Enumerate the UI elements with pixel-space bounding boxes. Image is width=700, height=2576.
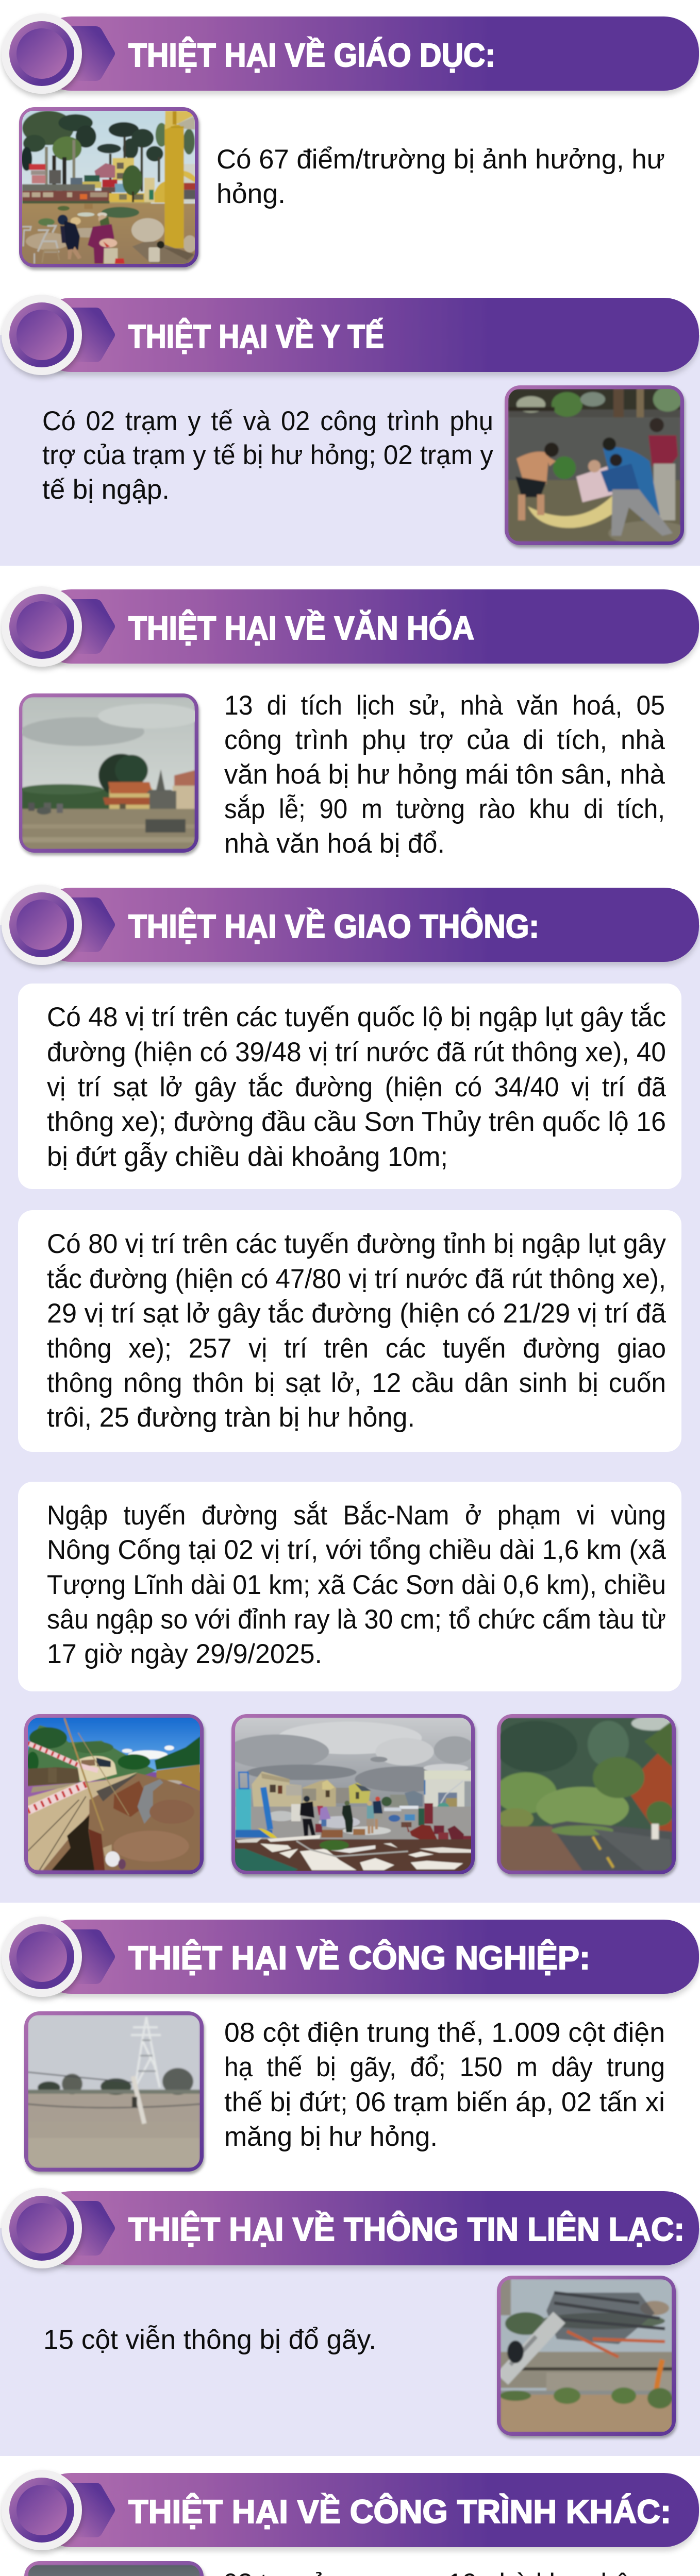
text: education damage: hỏng. — [216, 179, 286, 209]
photo: landslide on forest road — [495, 1714, 676, 1874]
text: health damage — [42, 406, 493, 505]
heading: culture: THIỆT HẠI VỀ VĂN HÓA — [128, 609, 474, 647]
photo: flooded temple — [19, 693, 201, 853]
heading: culture — [2, 586, 699, 667]
heading: health: THIỆT HẠI VỀ Y TẾ — [128, 317, 384, 355]
card: provincial roads: Có 80 vị trí trên các tuyến đường tỉnh bị ngập lụt gây — [47, 1229, 666, 1259]
text: communications damage: 15 cột viễn thông bị đổ gãy. — [43, 2325, 376, 2355]
text: education damage: Có 67 điểm/trường bị ảnh hưởng, hư — [216, 144, 665, 175]
panel: industry — [2, 1917, 699, 2172]
heading: transport: THIỆT HẠI VỀ GIAO THÔNG: — [128, 907, 539, 945]
card: railway: 17 giờ ngày 29/9/2025. — [47, 1639, 322, 1669]
text: culture damage: công trình phụ trợ của di tích, nhà — [224, 725, 665, 755]
panel: culture — [2, 586, 699, 859]
card: national roads: Có 48 vị trí trên các tuyến quốc lộ bị ngập lụt gây tắc — [47, 1002, 666, 1032]
card: national roads: bị đứt gẫy chiều dài khoảng 10m; — [47, 1142, 448, 1172]
text: industry damage: thế bị đứt; 06 trạm biến áp, 02 tấn xi — [224, 2087, 665, 2117]
card: railway: Tượng Lĩnh dài 01 km; xã Các Sơn dài 0,6 km), chiều — [47, 1570, 666, 1600]
card: national roads: vị trí sạt lở gây tắc đường (hiện có 34/40 vị trí đã — [47, 1072, 666, 1103]
text: health damage: Có 02 trạm y tế và 02 công trình phụ — [42, 406, 493, 436]
card: national roads: đường (hiện có 39/48 vị trí nước đã rút thông xe), 40 — [47, 1037, 666, 1067]
text: education damage — [216, 144, 665, 209]
card: provincial roads: trôi, 25 đường tràn bị hư hỏng. — [47, 1402, 415, 1433]
panel: transport — [2, 885, 699, 1874]
heading: education — [2, 13, 699, 94]
card: provincial roads — [18, 1210, 681, 1452]
heading: other works — [2, 2470, 699, 2550]
card: national roads: thông xe); đường đầu cầu Sơn Thủy trên quốc lộ 16 — [47, 1107, 666, 1137]
photo: collapsed walls and debris — [226, 1714, 475, 1874]
photo: flooded power pole — [24, 2011, 204, 2172]
card: railway: Ngập tuyến đường sắt Bắc-Nam ở phạm vi vùng — [47, 1500, 666, 1531]
section background: transport — [0, 925, 700, 1903]
panel: health — [2, 295, 699, 546]
photo: flooded school yard — [19, 107, 198, 267]
photo: fallen telecom tower — [497, 2276, 676, 2436]
text: industry damage: măng bị hư hỏng. — [224, 2122, 438, 2152]
text: culture damage: 13 di tích lịch sử, nhà văn hoá, 05 — [224, 690, 665, 721]
text: health damage: tế bị ngập. — [42, 474, 170, 505]
panel: communications — [2, 2188, 699, 2436]
photo: eroded road — [24, 1714, 204, 1874]
section background: health — [0, 335, 700, 566]
photo: people with boat in floodwater — [505, 385, 691, 546]
text: industry damage — [224, 2018, 665, 2152]
text: culture damage — [224, 690, 665, 859]
card: railway: sâu ngập so với đỉnh ray là 30 cm; tổ chức cấm tàu từ — [47, 1604, 666, 1635]
heading: industry: THIỆT HẠI VỀ CÔNG NGHIỆP: — [128, 1939, 590, 1976]
text: culture damage: văn hoá bị hư hỏng mái tôn sân, nhà — [224, 759, 665, 790]
heading: industry — [2, 1917, 699, 1997]
card: railway — [18, 1482, 681, 1691]
section background: communications — [0, 2228, 700, 2456]
text: health damage: trợ của trạm y tế bị hư hỏng; 02 trạm y — [42, 440, 493, 470]
text: culture damage: nhà văn hoá bị đổ. — [224, 828, 445, 859]
card: provincial roads: thông xe); 257 vị trí trên các tuyến đường giao — [47, 1333, 666, 1364]
heading: education: THIỆT HẠI VỀ GIÁO DỤC: — [128, 36, 495, 74]
heading: communications — [2, 2188, 699, 2268]
card: provincial roads: tắc đường (hiện có 47/80 vị trí nước đã rút thông xe), — [47, 1264, 666, 1294]
heading: communications: THIỆT HẠI VỀ THÔNG TIN LIÊN LẠC: — [128, 2210, 685, 2248]
text: industry damage: hạ thế bị gãy, đổ; 150 m dây trung — [224, 2052, 665, 2082]
text: culture damage: sắp lễ; 90 m tường rào khu di tích, — [224, 794, 665, 824]
panel: education — [2, 13, 699, 267]
card: national roads — [18, 984, 681, 1189]
card: provincial roads: 29 vị trí sạt lở gây tắc đường (hiện có 21/29 vị trí đã — [47, 1298, 666, 1329]
text: industry damage: 08 cột điện trung thế, 1.009 cột điện — [224, 2018, 665, 2048]
photo: flooded warehouse street — [24, 2561, 204, 2576]
panel: other works — [2, 2470, 699, 2576]
heading: health — [2, 295, 699, 375]
card: railway: Nông Cống tại 02 vị trí, với tổng chiều dài 1,6 km (xã — [47, 1535, 666, 1565]
card: provincial roads: thông nông thôn bị sạt lở, 12 cầu dân sinh bị cuốn — [47, 1368, 666, 1398]
heading: other works: THIỆT HẠI VỀ CÔNG TRÌNH KHÁC: — [128, 2493, 671, 2530]
heading: transport — [2, 885, 699, 965]
